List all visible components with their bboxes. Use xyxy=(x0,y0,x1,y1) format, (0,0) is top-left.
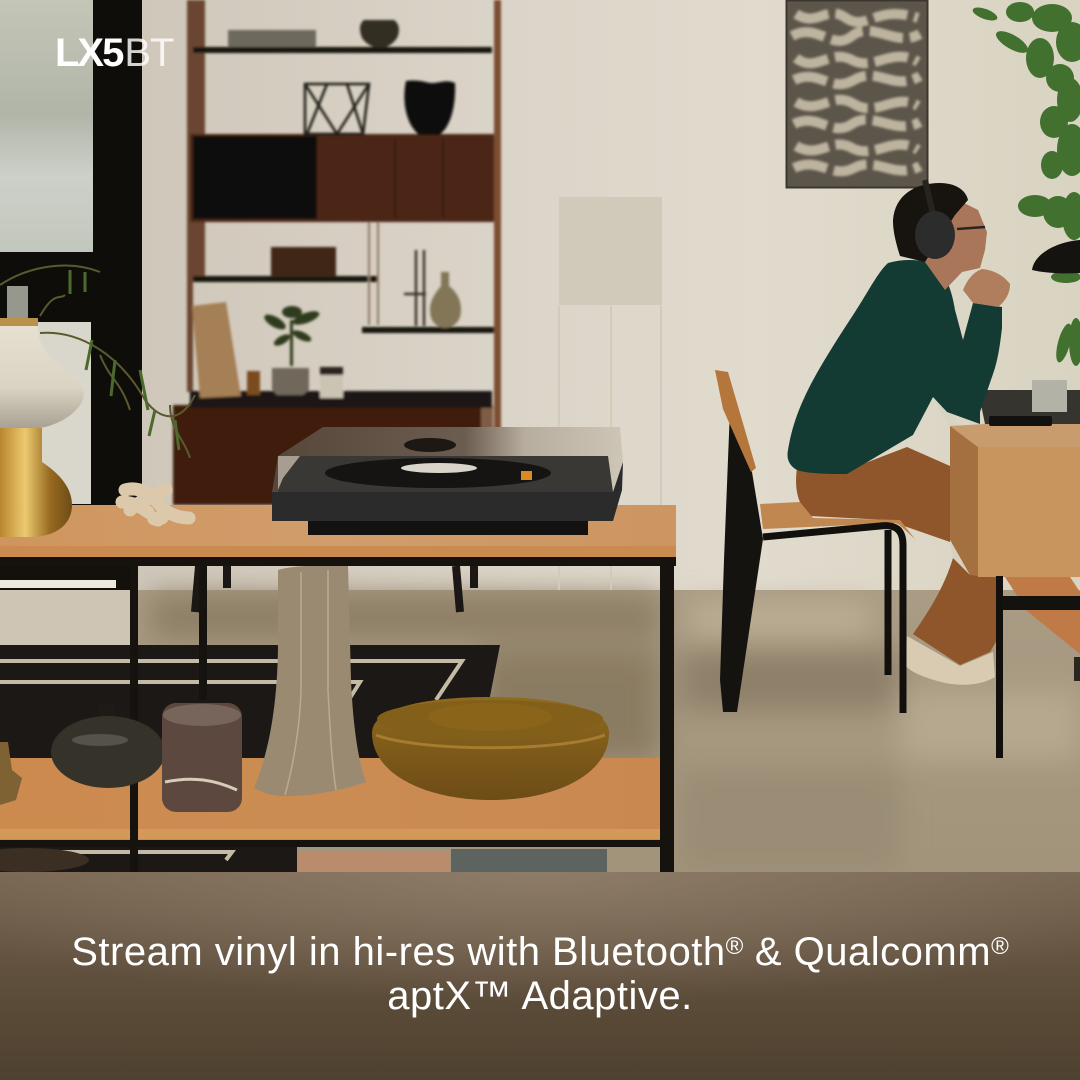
floor light and shadow patches xyxy=(150,594,1080,870)
caption band xyxy=(0,872,1080,1080)
brand logo: LX5BT xyxy=(55,31,173,75)
branch sprigs xyxy=(0,266,195,458)
desk xyxy=(950,416,1080,758)
headphones xyxy=(915,180,955,259)
face xyxy=(925,196,987,290)
marble canister xyxy=(162,703,242,812)
bookshelf xyxy=(173,0,501,505)
caption text: Stream vinyl in hi-res with Bluetooth® & Qualcomm® xyxy=(71,930,1009,974)
person legs xyxy=(796,447,1080,685)
hand xyxy=(963,269,1010,307)
hair xyxy=(893,183,968,262)
table legs xyxy=(134,566,203,872)
table lamp xyxy=(0,286,84,537)
turntable xyxy=(272,427,623,535)
upper tabletop xyxy=(0,505,676,558)
lower table shelf and frame xyxy=(0,427,676,872)
rug xyxy=(0,645,500,872)
glasses xyxy=(957,227,985,229)
knot sculpture xyxy=(122,489,189,520)
dark glass bowl xyxy=(0,848,89,872)
caption text xyxy=(71,930,1009,1018)
framed art xyxy=(786,0,928,188)
caption text: aptX™ Adaptive. xyxy=(387,974,693,1018)
wall xyxy=(0,0,1080,592)
wall panel speaker xyxy=(559,197,662,590)
chair xyxy=(715,370,915,713)
paper vase xyxy=(254,565,366,796)
lower wood shelf xyxy=(0,758,673,829)
brass ornament xyxy=(0,742,22,805)
desk surface xyxy=(933,380,1080,428)
smoked glass jar xyxy=(51,704,165,788)
shelf ornaments xyxy=(192,20,461,398)
wall lamp xyxy=(1032,240,1080,273)
window and dark frame xyxy=(0,0,142,645)
floor xyxy=(0,590,1080,872)
person upper body with headphones xyxy=(787,180,1010,474)
amber ceramic bowl xyxy=(372,697,609,800)
hanging plant xyxy=(971,2,1080,366)
sweater xyxy=(787,260,1002,474)
background chair legs xyxy=(195,566,474,612)
books and storage boxes xyxy=(297,849,607,872)
